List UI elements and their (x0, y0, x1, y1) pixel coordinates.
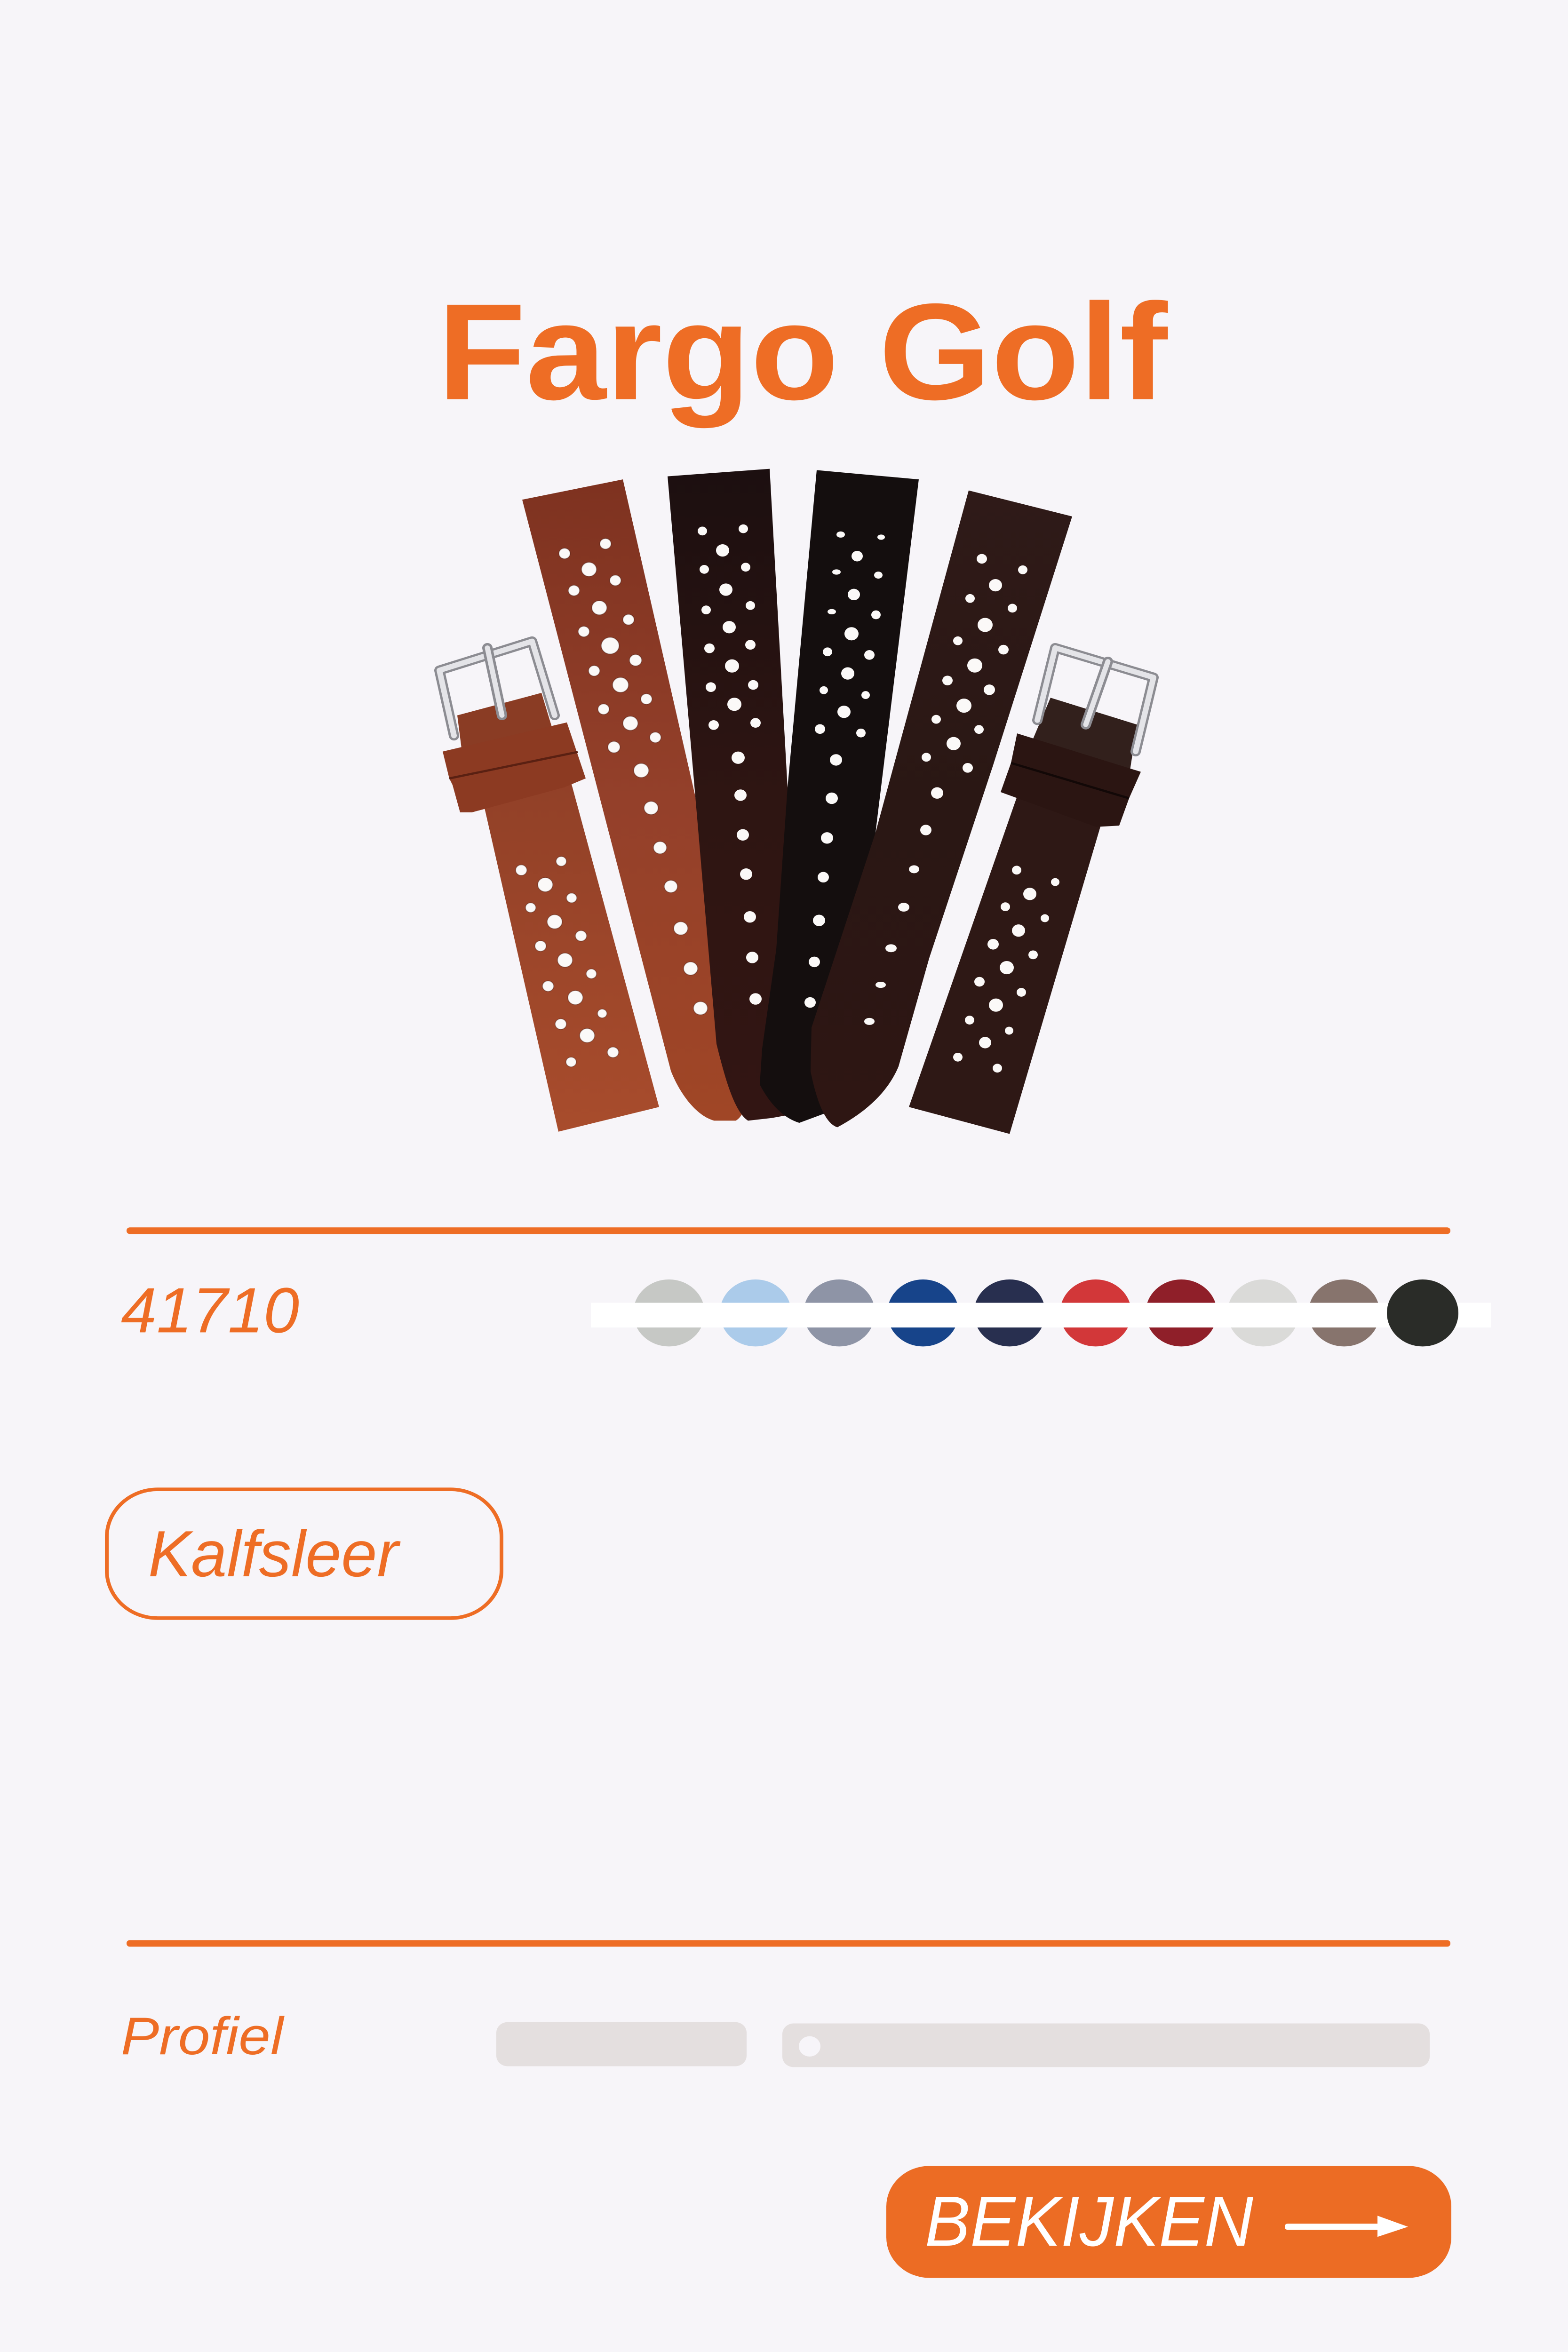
profile bar long with dot (782, 2024, 1430, 2067)
profile label: Profiel (121, 2007, 285, 2066)
icon: arrow (1285, 2216, 1408, 2237)
button: BEKIJKEN: BEKIJKEN (925, 2182, 1253, 2261)
profile bar short (496, 2022, 747, 2066)
strap: red-brown long piece (522, 479, 743, 1120)
divider line bottom (127, 1940, 1450, 1947)
material tag: Kalfsleer (107, 1489, 501, 1618)
article number: 41710 (121, 1275, 299, 1346)
icon: left buckle (439, 641, 555, 736)
colour swatches (591, 1279, 1491, 1346)
title: Fargo Golf (438, 275, 1169, 429)
product image: five perforated leather watch straps (439, 469, 1154, 1134)
strap: dark brown piece (668, 469, 809, 1120)
strap: black piece (760, 470, 919, 1123)
strap: dark chocolate piece (811, 491, 1072, 1127)
material tag: Kalfsleer: Kalfsleer (148, 1518, 401, 1590)
strap: right buckled dark piece (909, 648, 1154, 1134)
button: BEKIJKEN (886, 2166, 1451, 2278)
icon: right buckle (1037, 648, 1154, 752)
strap: left buckled red-brown piece (439, 641, 659, 1132)
divider line top (127, 1227, 1450, 1234)
